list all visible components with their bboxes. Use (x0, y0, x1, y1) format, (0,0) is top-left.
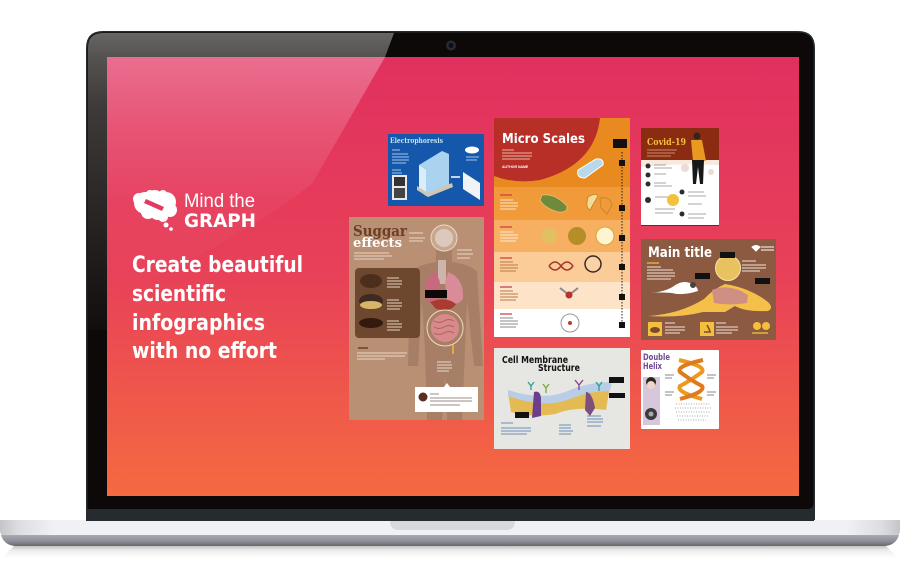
dissected rat (648, 284, 771, 316)
card: Micro Scales: AUTHOR NAME (502, 165, 529, 169)
card: Cell Membrane Structure: Cell Membrane (502, 355, 568, 366)
figure: person with mask (691, 132, 706, 184)
headline: infographics (132, 311, 265, 336)
laptop screen (107, 57, 799, 496)
card: Suggar effects: Suggar (353, 222, 408, 240)
organs (425, 260, 463, 354)
card: Micro Scales: Micro Scales (502, 131, 585, 147)
card: Double Helix: Double (643, 353, 670, 363)
card: Covid-19: Covid-19 (647, 138, 686, 148)
headline: Create beautiful (132, 253, 303, 278)
laptop base (0, 520, 900, 558)
headline: scientific (132, 282, 226, 307)
laptop lid (86, 31, 815, 521)
trackpad notch (390, 521, 515, 530)
icon: mitochondrion (578, 159, 603, 178)
card: Cell Membrane Structure: Structure (538, 363, 580, 374)
wordmark (184, 190, 256, 232)
logo: Mind the Graph (133, 190, 256, 232)
card: Main title: Main title (648, 245, 712, 261)
callout (415, 383, 478, 412)
card: Double Helix: Helix (643, 362, 662, 372)
card: Suggar effects: effects (353, 236, 402, 251)
body silhouette (408, 250, 483, 420)
card: Cell Membrane Structure (494, 348, 630, 449)
panel: donuts (355, 268, 420, 338)
icon: brain with pencil (133, 190, 177, 231)
screen glare (88, 33, 394, 330)
card: Main title (641, 239, 776, 340)
headline (132, 253, 303, 364)
card: Electrophoresis: Electrophoresis (390, 136, 443, 145)
card: Micro Scales (494, 118, 630, 337)
mouse (650, 282, 698, 294)
wordmark: Mind the (184, 190, 255, 212)
card: Covid-19 (641, 128, 719, 226)
wordmark: GRAPH (184, 211, 256, 232)
membrane (508, 386, 610, 416)
headline: with no effort (132, 339, 277, 364)
brain circle (431, 225, 457, 251)
card: Suggar effects (349, 217, 484, 420)
webcam (446, 40, 456, 50)
card: Double Helix (641, 350, 719, 429)
card: Electrophoresis (388, 134, 484, 206)
base reflection (2, 546, 898, 558)
